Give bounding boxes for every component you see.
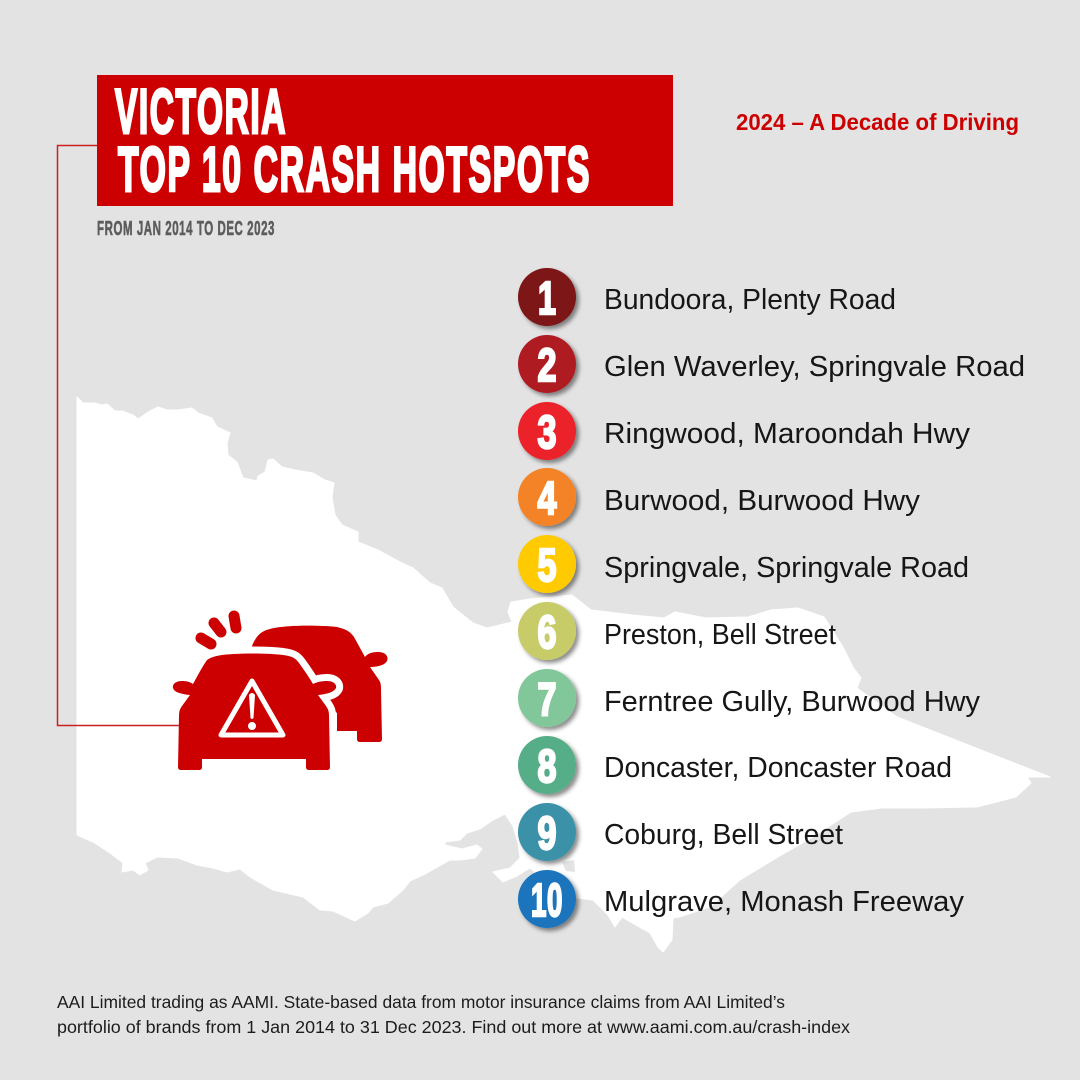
item 10: 10	[531, 874, 563, 926]
item 4	[518, 468, 920, 526]
item 5: Springvale, Springvale Road	[604, 552, 969, 584]
item 1	[518, 268, 896, 326]
title banner: VICTORIA	[115, 77, 287, 147]
campaign tagline: 2024 – A Decade of Driving	[736, 109, 1019, 135]
icon: two crashed cars with warning triangle	[173, 616, 388, 770]
item 7	[518, 669, 980, 727]
item 9: 9	[538, 807, 556, 859]
item 7: 7	[538, 673, 556, 725]
item 3	[518, 402, 971, 460]
item 2: Glen Waverley, Springvale Road	[604, 351, 1025, 383]
item 8: 8	[538, 740, 556, 792]
icon: front car	[173, 654, 336, 770]
item 7: Ferntree Gully, Burwood Hwy	[604, 686, 980, 718]
subtitle: date range: FROM JAN 2014 TO DEC 2023	[97, 218, 275, 240]
item 8: Doncaster, Doncaster Road	[604, 752, 952, 784]
footer disclaimer: AAI Limited trading as AAMI. State-based data from motor insurance claims from AAI Limited’s	[57, 992, 785, 1012]
item 3: Ringwood, Maroondah Hwy	[604, 418, 971, 450]
item 10	[518, 870, 964, 928]
connector line from title to car icon	[58, 146, 179, 726]
item 8	[518, 736, 952, 794]
item 6: Preston, Bell Street	[604, 619, 836, 651]
title banner	[97, 75, 673, 206]
item 6	[518, 602, 836, 660]
item 2: 2	[538, 339, 556, 391]
item 5: 5	[538, 539, 556, 591]
item 2	[518, 335, 1025, 393]
map: Victoria silhouette	[77, 397, 1050, 952]
footer disclaimer: portfolio of brands from 1 Jan 2014 to 31 Dec 2023. Find out more at www.aami.com.au/crash-index	[57, 1017, 850, 1037]
item 9	[518, 803, 843, 861]
item 3: 3	[538, 406, 556, 458]
title banner: TOP 10 CRASH HOTSPOTS	[118, 135, 591, 205]
ranked hotspot list	[518, 268, 1025, 928]
item 1: 1	[538, 272, 556, 324]
icon: rear car	[252, 626, 388, 742]
item 1: Bundoora, Plenty Road	[604, 284, 896, 316]
item 10: Mulgrave, Monash Freeway	[604, 886, 964, 918]
item 5	[518, 535, 969, 593]
item 4: Burwood, Burwood Hwy	[604, 485, 920, 517]
icon: impact lines	[201, 616, 236, 644]
item 4: 4	[538, 472, 557, 524]
footer disclaimer	[57, 992, 850, 1037]
icon: warning triangle	[221, 681, 283, 735]
item 9: Coburg, Bell Street	[604, 819, 843, 851]
item 6: 6	[538, 606, 556, 658]
